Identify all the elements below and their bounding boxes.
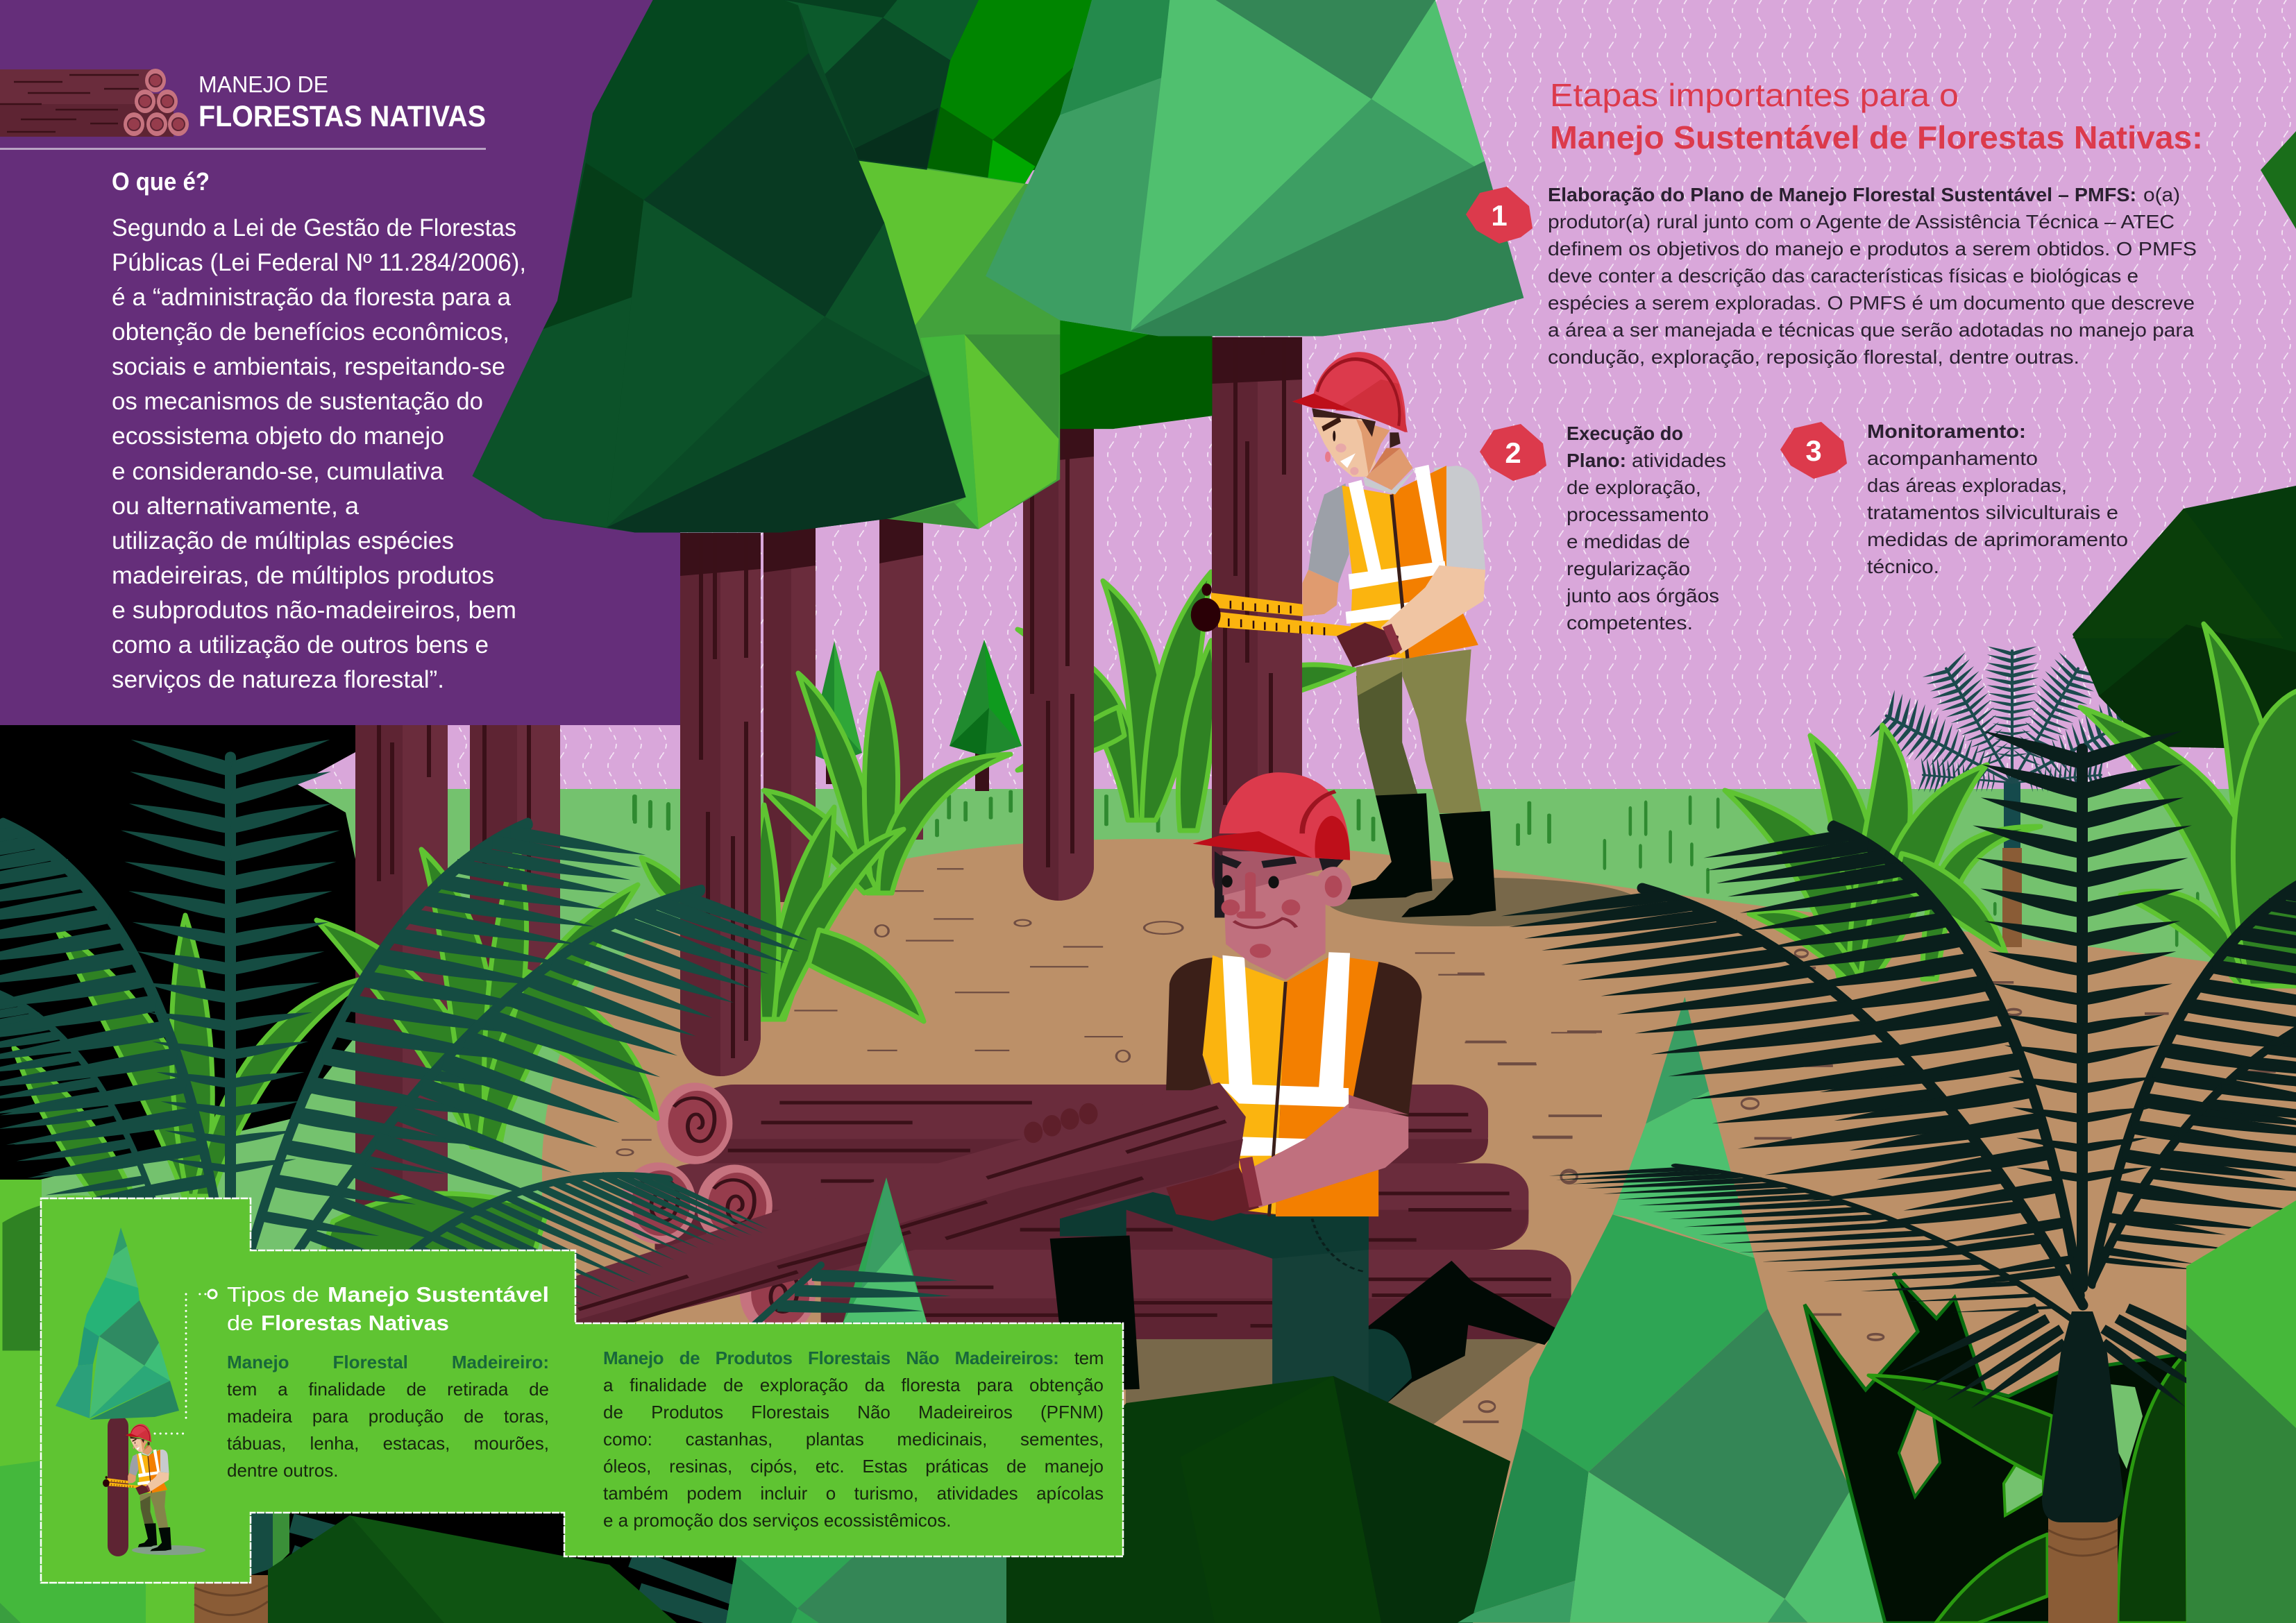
black forest mass on left (0, 725, 385, 1189)
bright green undergrowth on far left (0, 1180, 42, 1471)
grass ticks (634, 792, 2197, 944)
text block: o que e: Segundo a Lei de Gestão de Florestas (112, 214, 516, 241)
header: log icon and title (0, 69, 486, 150)
text block: o que e: sociais e ambientais, respeitando-se (112, 353, 505, 380)
text: step 2: de exploração, (1567, 477, 1701, 498)
right fern clusters (1725, 624, 2296, 986)
text: step 2: processamento (1567, 504, 1709, 525)
text: step 3: das áreas exploradas, (1867, 475, 2067, 496)
canopy: big dark tree (473, 0, 966, 533)
text: step 3: medidas de aprimoramento (1867, 529, 2128, 550)
heading: etapas importantes: Etapas importantes para o (1550, 77, 1959, 113)
text: manejo de produtos nao madeireiros: óleos, resinas, cipós, etc. Estas práticas de manejo (603, 1456, 1104, 1477)
text block: o que e (112, 167, 526, 693)
purple information panel background (0, 0, 680, 725)
text block: o que e: madeireiras, de múltiplos produtos (112, 562, 494, 589)
text: step 1: Elaboração do Plano de Manejo Florestal Sustentável – PMFS: (1548, 184, 2136, 205)
log pile (621, 1082, 1571, 1339)
text: step 1: deve conter a descrição das características físicas e biológicas e (1548, 265, 2138, 287)
icon: badge 2: 2 (1505, 436, 1521, 469)
panel heading: de (227, 1311, 253, 1335)
text: step 1: o(a) (2143, 184, 2180, 205)
canopy: light green tree (847, 155, 1060, 529)
text: manejo florestal madeireiro (227, 1349, 549, 1488)
panel heading: Florestas Nativas (261, 1311, 449, 1335)
text: step 3: técnico. (1867, 556, 1939, 577)
text: manejo de produtos nao madeireiros: e a promoção dos serviços ecossistêmicos. (603, 1510, 951, 1531)
title (199, 71, 486, 133)
icon: badge 1: 1 (1491, 199, 1508, 232)
step 3 (1780, 420, 2128, 577)
text: step 2: atividades (1632, 450, 1726, 471)
icon: badge 2 (1480, 424, 1546, 481)
dirt marks (617, 869, 2276, 1422)
fern cluster near central trunk (641, 805, 924, 1021)
text block: o que e: e subprodutos não-madeireiros, bem (112, 597, 516, 624)
fern cluster behind first trunks (764, 572, 1354, 893)
text: manejo florestal madeireiro: tem a finalidade de retirada de (227, 1379, 549, 1400)
icon: mini worker (103, 1424, 205, 1555)
text block: o que e: ou alternativamente, a (112, 493, 360, 520)
palm trunk, right (2042, 1311, 2124, 1623)
text block: o que e: como a utilização de outros bens e (112, 631, 489, 658)
text: step 1: a área a ser manejada e técnicas que serão adotadas no manejo para (1548, 319, 2194, 341)
small frond behind the panel (754, 1265, 958, 1325)
text: manejo de produtos nao madeireiros: Manejo de Produtos Florestais Não Madeireiros: tem (603, 1348, 1104, 1368)
text: manejo de produtos nao madeireiros: também podem incluir o turismo, atividades apícolas (603, 1483, 1104, 1504)
text: step 2: Execução do (1567, 423, 1683, 444)
palm frond: low arching over logs (361, 1068, 768, 1443)
ground shadow under standing worker (1328, 878, 1639, 926)
centre bottom dark bush (1006, 1376, 1510, 1623)
kneeling worker carrying a log (575, 772, 1558, 1443)
right edge leaf and dark tree (2073, 131, 2296, 749)
worker measuring the tree (1191, 352, 1496, 917)
tree trunks (1023, 337, 1302, 917)
text: step 3: tratamentos silviculturais e (1867, 502, 2118, 523)
back trunks (355, 486, 923, 1244)
heading: etapas importantes (1550, 77, 2203, 155)
panel: tipos de manejo sustentavel (41, 1198, 1123, 1583)
icon: stacked logs (0, 69, 189, 137)
bottom dark bushes and stripes (0, 1461, 736, 1623)
text: manejo florestal madeireiro: tábuas, lenha, estacas, mourões, (227, 1433, 549, 1454)
text block: o que e: ecossistema objeto do manejo (112, 423, 444, 450)
step 1 (1466, 184, 2197, 368)
icon: mini tree (56, 1227, 179, 1556)
title: MANEJO DE (199, 71, 328, 97)
text: manejo de produtos nao madeireiros: a finalidade de exploração da floresta para obtenção (603, 1375, 1104, 1395)
step 2 (1480, 423, 1726, 634)
icon: badge 1 (1466, 187, 1533, 244)
palm frond: left curving right (176, 824, 705, 1291)
text: manejo de produtos nao madeireiros: de Produtos Florestais Não Madeireiros (PFNM) (603, 1402, 1104, 1422)
large foreground polygon tree, bottom right (1458, 997, 1885, 1623)
text: step 3: Monitoramento: (1867, 420, 2026, 442)
text: manejo florestal madeireiro: dentre outros. (227, 1460, 338, 1481)
palm frond: long left curving right (264, 833, 814, 1380)
text: step 3: acompanhamento (1867, 448, 2038, 469)
connector dots (155, 1290, 217, 1434)
text: manejo florestal madeireiro: madeira para produção de toras, (227, 1406, 549, 1427)
canopy: dark tree behind (763, 0, 979, 170)
central foreground trunk (680, 533, 761, 1076)
text block: o que e: serviços de natureza florestal”. (112, 666, 444, 693)
text block: o que e: Públicas (Lei Federal Nº 11.284/2006), (112, 249, 526, 276)
text: manejo de produtos nao madeireiros (603, 1345, 1104, 1539)
text: step 1: produtor(a) rural junto com o Agente de Assistência Técnica – ATEC (1548, 211, 2175, 232)
palm frond: left arching (0, 824, 354, 1291)
text: step 2: Plano: (1567, 450, 1626, 471)
text: step 1: condução, exploração, reposição florestal, dentre outras. (1548, 346, 2079, 368)
text: step 2: e medidas de (1567, 531, 1690, 552)
bright green polygon, far right (2186, 1200, 2296, 1623)
text: step 2: junto aos órgãos (1566, 585, 1719, 606)
dirt ground (542, 839, 2296, 1623)
text block: o que e: os mecanismos de sustentação do (112, 388, 483, 415)
text: step 3 (1867, 420, 2128, 577)
grass band (0, 789, 2296, 1623)
text: step 2: regularização (1567, 558, 1690, 579)
text block: o que e: utilização de múltiplas espécies (112, 527, 454, 554)
title: FLORESTAS NATIVAS (199, 100, 486, 133)
text: manejo florestal madeireiro: Manejo Florestal Madeireiro: (227, 1352, 549, 1373)
text block: o que e: O que é? (112, 167, 210, 196)
background palm (1866, 645, 2158, 947)
canopy: bright green tree (927, 0, 1212, 429)
small foreground tree, bottom centre (726, 1178, 1034, 1623)
shadow under logs (1126, 1336, 1548, 1623)
panel heading (227, 1282, 549, 1335)
text block: o que e: e considerando-se, cumulativa (112, 458, 444, 485)
text: step 2 (1566, 423, 1726, 634)
text: step 2: competentes. (1567, 612, 1693, 634)
text: step 1: definem os objetivos do manejo e produtos a serem obtidos. O PMFS (1548, 238, 2197, 260)
black palm fronds, right (1501, 724, 2296, 1413)
text block: o que e: é a “administração da floresta para a (112, 284, 512, 311)
canopy: big light tree (986, 0, 1523, 336)
palm frond: far left (0, 992, 215, 1263)
small background pines (808, 640, 1022, 791)
panel heading: Tipos de (227, 1282, 319, 1307)
heading: etapas importantes: Manejo Sustentável de Florestas Nativas: (1550, 119, 2203, 155)
panel heading: Manejo Sustentável (328, 1282, 549, 1307)
icon: badge 3 (1780, 422, 1847, 479)
text block: o que e: obtenção de benefícios econômicos, (112, 318, 509, 346)
icon: badge 3: 3 (1805, 434, 1822, 467)
text: step 1: espécies a serem exploradas. O PMFS é um documento que descreve (1548, 292, 2195, 314)
left fern clusters (0, 847, 657, 1353)
text: step 1 (1548, 184, 2197, 368)
palm frond: left upright straight (119, 733, 341, 1274)
text: manejo de produtos nao madeireiros: como: castanhas, plantas medicinais, sementes, (603, 1429, 1104, 1450)
dark leaves, bottom right (1805, 1273, 2188, 1623)
